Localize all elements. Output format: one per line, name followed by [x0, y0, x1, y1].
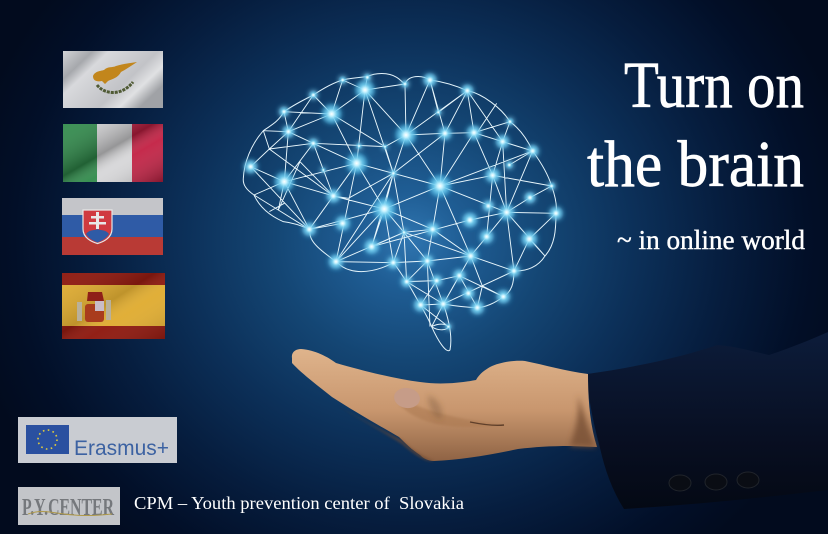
thumbnail: [393, 386, 421, 410]
flag: Cyprus: [63, 51, 163, 108]
coat of arms: [77, 292, 111, 322]
Erasmus+ logo: Erasmus+: [74, 437, 169, 460]
network links: [251, 77, 556, 330]
sleeve: [587, 332, 828, 509]
thumb and palm shading: [395, 396, 504, 427]
subtitle: ~ in online world: [617, 225, 805, 255]
EU flag: [26, 425, 69, 454]
flag: Spain: [62, 273, 165, 339]
coat of arms: [83, 210, 112, 244]
glowing nodes: [243, 72, 564, 331]
flag: Italy: [63, 124, 163, 182]
P.Y. Center logo: P.Y.CENTER: [22, 495, 114, 521]
title: the brain: [587, 128, 804, 201]
organisation caption: CPM – Youth prevention center of Slovakia: [134, 493, 464, 513]
hand: [292, 349, 597, 461]
flag: Slovakia: [62, 198, 163, 255]
sleeve buttons: [669, 472, 759, 491]
title: [587, 49, 804, 201]
Erasmus+ logo: [18, 417, 177, 463]
brain network illustration: [243, 72, 564, 351]
brain outline: [243, 73, 556, 351]
title: Turn on: [624, 49, 804, 122]
P.Y. Center logo: [18, 487, 120, 525]
